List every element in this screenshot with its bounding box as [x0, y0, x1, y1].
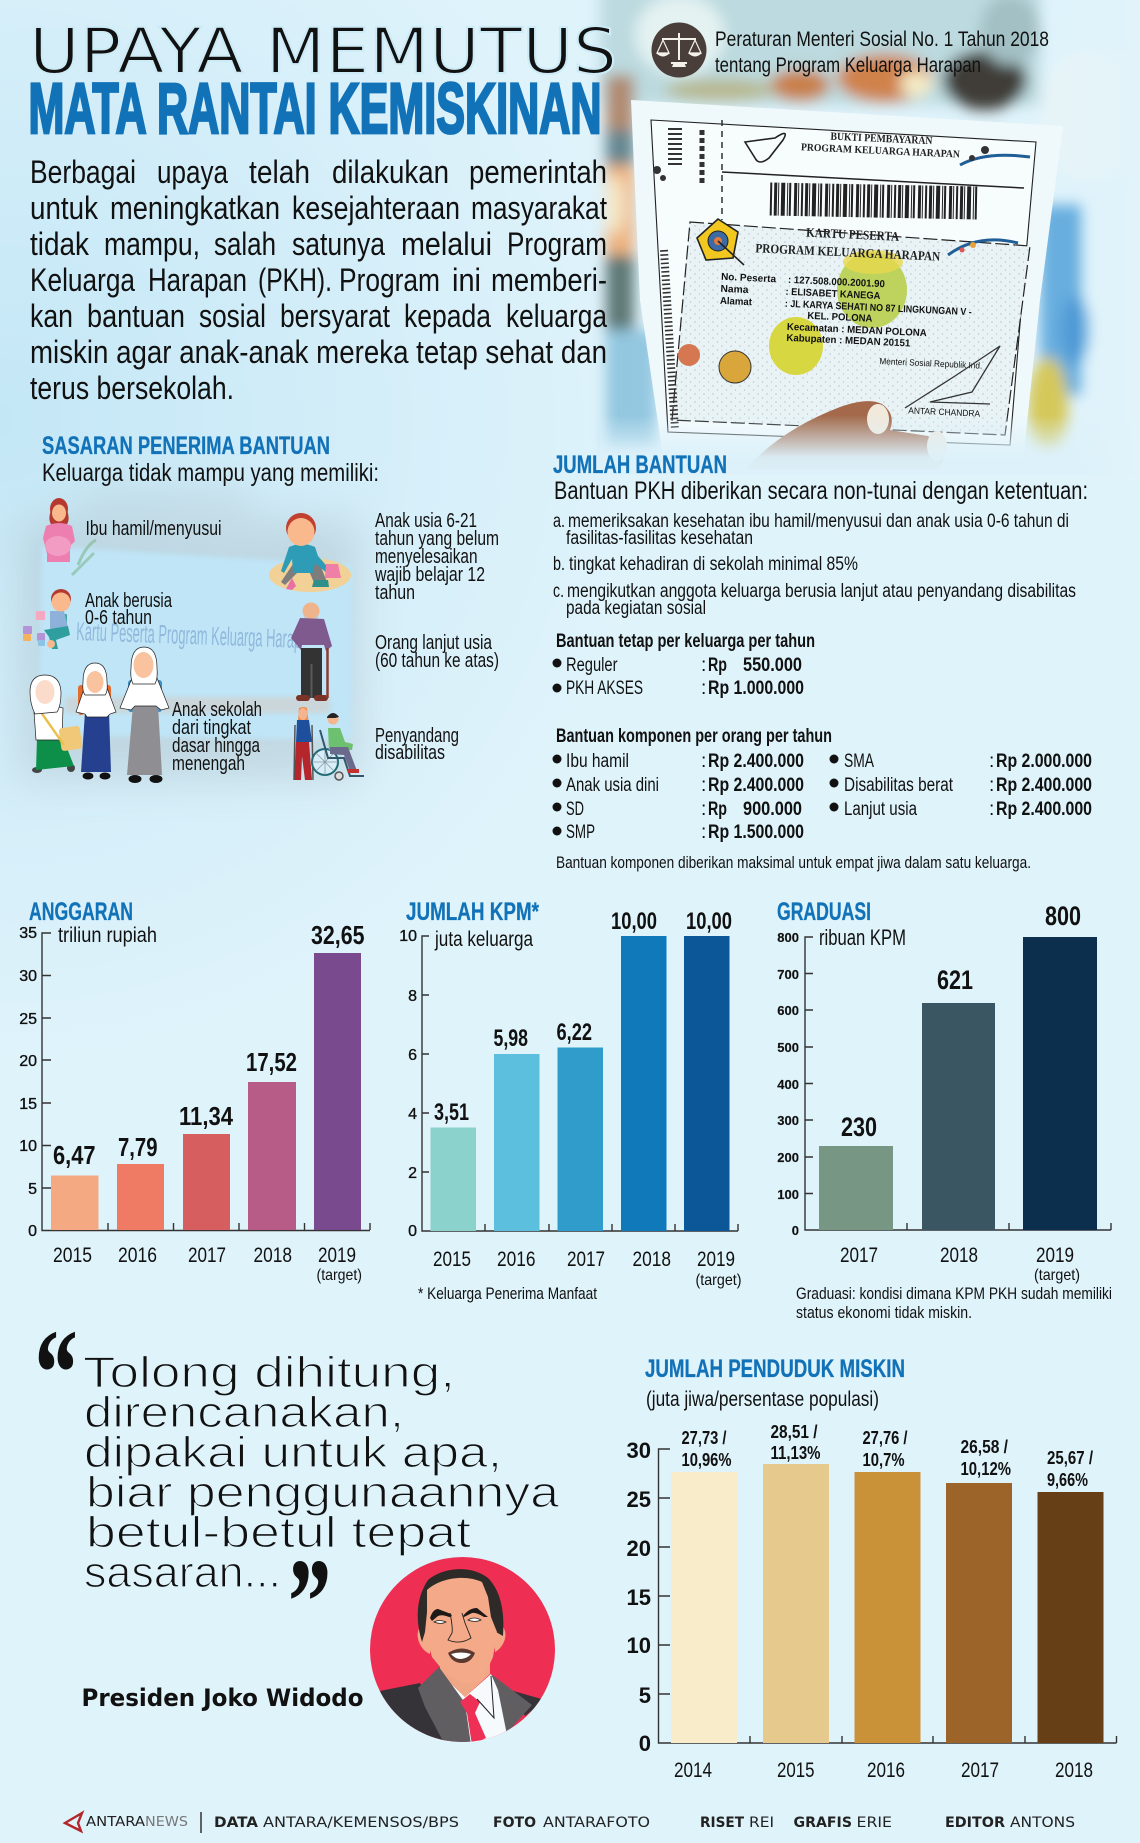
y axis: 30 — [19, 968, 37, 985]
credit: foto — [493, 1815, 650, 1831]
bantuan komponen table: Rp 2.400.000 — [708, 775, 804, 796]
intro paragraph: masyarakat — [471, 190, 607, 226]
credit: data: ANTARA/KEMENSOS/BPS — [263, 1815, 459, 1831]
bantuan tetap table — [552, 631, 815, 699]
note: status ekonomi tidak miskin. — [796, 1303, 972, 1322]
values — [841, 901, 1081, 1142]
y axis: 30 — [627, 1438, 651, 1463]
bantuan komponen table: Rp 1.500.000 — [708, 822, 804, 843]
bantuan tetap table: Reguler — [566, 655, 618, 676]
icon: school girls — [30, 647, 169, 783]
values: 10,12% — [960, 1459, 1011, 1479]
intro paragraph: bantuan — [87, 298, 185, 334]
bantuan komponen table: Rp 2.400.000 — [996, 799, 1092, 820]
regulation reference: Peraturan Menteri Sosial No. 1 Tahun 2018 — [715, 28, 1049, 51]
quote text — [83, 1348, 560, 1597]
y axis: 100 — [777, 1187, 799, 1202]
values: 27,73 / — [682, 1428, 726, 1448]
years: 2018 — [632, 1248, 671, 1271]
bantuan tetap table: PKH AKSES — [566, 678, 643, 699]
intro paragraph: untuk — [30, 190, 99, 226]
intro paragraph — [30, 154, 607, 406]
credit: editor: ANTONS — [1010, 1815, 1075, 1831]
conditions list: a. — [553, 511, 565, 532]
quote text: direncanakan, — [84, 1388, 404, 1437]
label: dasar hingga — [172, 735, 261, 757]
years: 2015 — [433, 1248, 471, 1271]
chart: jumlah penduduk miskin — [627, 1355, 1116, 1782]
card texts: Kabupaten : MEDAN 20151 — [786, 333, 911, 349]
bantuan komponen table: Lanjut usia — [844, 799, 917, 820]
y axis — [19, 925, 370, 1240]
bantuan tetap table: : — [701, 678, 706, 699]
label: Anak usia 6-21 — [375, 510, 477, 532]
intro paragraph: satunya — [292, 226, 385, 262]
values: 11,34 — [179, 1101, 233, 1131]
note — [796, 1284, 1112, 1322]
title — [28, 15, 617, 149]
label: 0-6 tahun — [85, 607, 152, 629]
bantuan komponen table: Ibu hamil — [566, 751, 629, 772]
card texts: Kecamatan : MEDAN POLONA — [787, 322, 927, 339]
heading: jumlah bantuan: JUMLAH BANTUAN — [553, 451, 727, 479]
heading: sasaran: SASARAN PENERIMA BANTUAN — [42, 432, 330, 460]
conditions list: pada kegiatan sosial — [566, 598, 706, 619]
y axis: 15 — [19, 1096, 37, 1113]
y axis: 5 — [28, 1181, 37, 1198]
bantuan komponen table: Anak usia dini — [566, 775, 659, 796]
y axis: 0 — [408, 1223, 417, 1240]
y axis: 6 — [408, 1047, 417, 1064]
bantuan komponen table: Disabilitas berat — [844, 775, 954, 796]
values: 25,67 / — [1047, 1448, 1093, 1468]
credit: editor: EDITOR — [945, 1815, 1005, 1831]
panel: jumlah bantuan — [552, 451, 1092, 872]
bantuan tetap table: : — [701, 655, 706, 676]
card texts: Menteri Sosial Republik Ind. — [879, 356, 983, 371]
y axis: 200 — [777, 1150, 799, 1165]
y axis: 800 — [777, 930, 799, 945]
hand — [745, 401, 943, 470]
credit: riset: REI — [749, 1815, 774, 1831]
bars — [819, 937, 1097, 1230]
y axis: 15 — [627, 1585, 651, 1610]
years: 2017 — [188, 1244, 226, 1267]
bantuan tetap table: 550.000 — [743, 655, 802, 676]
y axis: 5 — [639, 1683, 651, 1708]
values: 3,51 — [434, 1099, 469, 1126]
card texts — [715, 126, 993, 419]
intro paragraph: terus bersekolah. — [30, 370, 234, 406]
label: Orang lanjut usia — [375, 632, 493, 654]
heading: anggaran: ANGGARAN — [29, 898, 133, 926]
label: Penyandang — [375, 725, 459, 747]
credit: editor — [945, 1815, 1075, 1831]
label: Anak sekolah — [172, 699, 262, 721]
label: Anak berusia — [85, 590, 173, 612]
values: 5,98 — [494, 1025, 528, 1052]
card texts: KARTU PESERTA — [806, 225, 900, 244]
y axis: 10 — [399, 928, 417, 945]
y axis — [399, 928, 738, 1240]
y axis: 0 — [792, 1223, 799, 1238]
values: 621 — [937, 965, 973, 995]
values: 10,00 — [686, 908, 732, 935]
intro paragraph: (PKH). — [258, 262, 332, 298]
intro paragraph: Program — [339, 262, 440, 298]
barcode — [770, 199, 977, 203]
photo: kartu peserta PKH — [600, 0, 1140, 480]
bars — [671, 1464, 1104, 1743]
label: menengah — [172, 753, 245, 775]
years: 2014 — [674, 1759, 712, 1782]
card texts: Nama — [720, 284, 749, 296]
label: Ibu hamil/menyusui — [86, 518, 222, 540]
values: 17,52 — [246, 1047, 297, 1077]
values: 800 — [1045, 901, 1081, 931]
y axis: 700 — [777, 967, 799, 982]
values: 26,58 / — [960, 1437, 1008, 1457]
conditions list: fasilitas-fasilitas kesehatan — [566, 528, 753, 549]
years: 2016 — [118, 1244, 157, 1267]
portrait: Presiden Joko Widodo — [370, 1557, 555, 1745]
footer credits — [65, 1812, 1075, 1833]
bantuan komponen table — [552, 726, 1092, 843]
panel: sasaran penerima bantuan — [23, 432, 499, 783]
logo: antaranews: NEWS — [145, 1815, 188, 1830]
conditions list: tingkat kehadiran di sekolah minimal 85% — [569, 554, 858, 575]
card sheet — [631, 100, 1063, 470]
values: 10,7% — [862, 1450, 904, 1470]
label: menyelesaikan — [375, 546, 478, 568]
bantuan tetap table: Rp 1.000.000 — [708, 678, 804, 699]
quote text: betul-betul tepat — [86, 1508, 471, 1557]
conditions list: c. — [553, 581, 564, 602]
intro paragraph: ini — [452, 262, 481, 298]
years: 2015 — [777, 1759, 814, 1782]
bantuan komponen table: Rp 2.400.000 — [996, 775, 1092, 796]
credit: foto: ANTARAFOTO — [543, 1815, 650, 1831]
years: 2018 — [1055, 1759, 1093, 1782]
chart: anggaran — [19, 898, 370, 1284]
card stamps — [837, 252, 907, 328]
y axis: 4 — [408, 1106, 417, 1123]
card texts: PROGRAM KELUARGA HARAPAN — [801, 142, 960, 161]
conditions list — [553, 511, 1076, 619]
intro paragraph: Program — [507, 226, 607, 262]
intro paragraph: meningkatkan — [110, 190, 280, 226]
y axis: 600 — [777, 1003, 799, 1018]
intro paragraph: Berbagai — [30, 154, 136, 190]
icon: scales of justice — [652, 22, 706, 78]
values: 10,00 — [611, 908, 657, 935]
y axis: 400 — [777, 1077, 799, 1092]
bantuan komponen table: : — [701, 799, 706, 820]
closing quote mark: ” — [283, 1534, 329, 1672]
title: UPAYA MEMUTUS — [29, 15, 617, 88]
y axis — [777, 930, 1111, 1238]
values: 27,76 / — [862, 1428, 908, 1448]
unit: ribuan KPM — [819, 925, 906, 950]
bantuan komponen table: : — [701, 751, 706, 772]
bantuan komponen table: 900.000 — [743, 799, 802, 820]
icon: pregnant mother — [43, 498, 75, 562]
credit: grafis: GRAFIS — [794, 1815, 852, 1831]
years: 2017 — [840, 1244, 878, 1267]
note: Bantuan komponen diberikan maksimal untuk empat jiwa dalam satu keluarga. — [556, 853, 1031, 872]
chart: jumlah KPM — [399, 898, 742, 1303]
bantuan komponen table: SD — [566, 799, 584, 820]
intro paragraph: sosial — [199, 298, 266, 334]
years: 2016 — [497, 1248, 536, 1271]
bantuan komponen table: : — [701, 822, 706, 843]
bantuan komponen table: Bantuan komponen per orang per tahun — [556, 726, 832, 747]
quote text: sasaran... — [84, 1548, 281, 1597]
y axis: 0 — [639, 1731, 651, 1756]
years — [840, 1244, 1080, 1284]
credit: riset: RISET — [700, 1815, 744, 1831]
intro paragraph: kan — [30, 298, 73, 334]
intro paragraph: keluarga — [506, 298, 607, 334]
intro paragraph: melalui — [401, 226, 492, 262]
ticket left perforations — [664, 250, 675, 430]
intro paragraph: dilakukan — [332, 154, 449, 190]
attribution: Presiden Joko Widodo — [82, 1684, 364, 1712]
years: 2016 — [867, 1759, 905, 1782]
label: disabilitas — [375, 742, 445, 764]
values: 230 — [841, 1112, 877, 1142]
credit: grafis: ERIE — [856, 1815, 892, 1831]
subheading: sasaran: Keluarga tidak mampu yang memiliki: — [42, 459, 379, 487]
bantuan komponen table: : — [989, 775, 994, 796]
intro paragraph: bersyarat — [280, 298, 390, 334]
intro paragraph: pemerintah — [469, 154, 607, 190]
values: 6,47 — [53, 1140, 96, 1170]
bantuan komponen table: : — [701, 775, 706, 796]
years: 2019 — [697, 1248, 735, 1271]
y axis: 35 — [19, 925, 37, 942]
quote text: biar penggunaannya — [86, 1468, 560, 1517]
quote text: dipakai untuk apa, — [84, 1428, 502, 1477]
bantuan tetap table: Bantuan tetap per keluarga per tahun — [556, 631, 815, 652]
years: (target) — [696, 1272, 742, 1289]
values: 6,22 — [556, 1019, 592, 1046]
values — [53, 920, 364, 1170]
heading: penduduk miskin: JUMLAH PENDUDUK MISKIN — [645, 1355, 905, 1383]
y axis: 0 — [28, 1223, 37, 1240]
label: tahun — [375, 582, 415, 604]
y axis: 10 — [19, 1138, 37, 1155]
y axis: 10 — [627, 1633, 651, 1658]
bantuan komponen table: SMP — [566, 822, 595, 843]
card texts: PROGRAM KELUARGA HARAPAN — [755, 240, 941, 264]
intro paragraph: Keluarga — [30, 262, 135, 298]
logo: antaranews: ANTARA — [86, 1815, 145, 1830]
quote text: Tolong dihitung, — [83, 1348, 455, 1397]
background: kartu peserta card — [20, 490, 360, 780]
bantuan komponen table: Rp — [708, 799, 727, 820]
intro paragraph: Harapan — [148, 262, 247, 298]
values: 9,66% — [1047, 1470, 1088, 1490]
years: 2019 — [318, 1244, 356, 1267]
bars — [430, 936, 730, 1231]
years — [433, 1248, 742, 1289]
values: 7,79 — [118, 1132, 158, 1162]
label: (60 tahun ke atas) — [375, 650, 499, 672]
bantuan komponen table: SMA — [844, 751, 874, 772]
card texts: : 127.508.000.2001.90 — [788, 275, 886, 290]
bantuan komponen table: : — [989, 751, 994, 772]
intro paragraph: upaya — [157, 154, 228, 190]
card texts: : JL KARYA SEHATI NO 87 LINGKUNGAN V - — [785, 299, 972, 318]
years — [53, 1244, 362, 1284]
conditions list: b. — [553, 554, 565, 575]
unit: (juta jiwa/persentase populasi) — [646, 1388, 879, 1411]
card texts: KEL. POLONA — [807, 311, 873, 325]
values: 32,65 — [311, 920, 364, 950]
icon: toddler with blocks — [23, 589, 71, 649]
regulation reference — [715, 28, 1049, 77]
logo: antaranews — [65, 1813, 188, 1831]
bantuan tetap table: Rp — [708, 655, 727, 676]
intro paragraph: miskin agar anak-anak mereka tetap sehat dan — [30, 334, 607, 370]
years — [674, 1759, 1093, 1782]
y axis — [627, 1438, 1116, 1756]
intro paragraph: mampu, — [104, 226, 200, 262]
unit: juta keluarga — [434, 928, 533, 951]
unit: triliun rupiah — [58, 924, 157, 947]
y axis: 2 — [408, 1165, 417, 1182]
years: 2017 — [961, 1759, 999, 1782]
intro paragraph: telah — [249, 154, 310, 190]
y axis: 300 — [777, 1113, 799, 1128]
bantuan komponen table: Rp 2.400.000 — [708, 751, 804, 772]
years: 2018 — [940, 1244, 978, 1267]
y axis: 20 — [19, 1053, 37, 1070]
bars — [51, 953, 361, 1230]
y axis: 25 — [19, 1011, 37, 1028]
regulation reference: tentang Program Keluarga Harapan — [715, 54, 981, 77]
background: kartu peserta card: Kartu Peserta Program Keluarga Harap — [76, 616, 302, 654]
values — [682, 1422, 1093, 1490]
bantuan komponen table: Rp 2.000.000 — [996, 751, 1092, 772]
credit: data — [214, 1815, 459, 1831]
credit: riset — [700, 1815, 774, 1831]
heading: jumlah kpm: JUMLAH KPM* — [406, 898, 539, 926]
quote — [30, 1305, 560, 1712]
years: 2018 — [254, 1244, 292, 1267]
values: 28,51 / — [770, 1422, 818, 1442]
card texts: : ELISABET KANEGA — [785, 287, 881, 302]
opening quote mark: “ — [30, 1305, 76, 1443]
intro paragraph: salah — [214, 226, 276, 262]
years: 2019 — [1036, 1244, 1074, 1267]
card logos — [745, 133, 785, 162]
icon: disabled people with wheelchair — [294, 707, 364, 780]
icon: elderly man with cane — [291, 602, 332, 701]
card texts: No. Peserta — [721, 272, 777, 285]
values: 11,13% — [770, 1443, 820, 1463]
values: 10,96% — [682, 1450, 732, 1470]
title: MATA RANTAI KEMISKINAN — [28, 70, 602, 149]
label: tahun yang belum — [375, 528, 499, 550]
credit: data: DATA — [214, 1815, 258, 1831]
years: (target) — [1034, 1267, 1080, 1284]
intro paragraph: memberi- — [491, 262, 607, 298]
card texts: ANTAR CHANDRA — [908, 405, 980, 419]
years: 2015 — [53, 1244, 92, 1267]
y axis: 500 — [777, 1040, 799, 1055]
footnote: * Keluarga Penerima Manfaat — [418, 1284, 597, 1303]
credit: foto: FOTO — [493, 1815, 536, 1831]
label: wajib belajar 12 — [374, 564, 485, 586]
credit: grafis — [794, 1815, 892, 1831]
label: dari tingkat — [172, 717, 251, 739]
card texts: Alamat — [720, 296, 753, 308]
years: (target) — [316, 1267, 362, 1284]
bantuan komponen table: : — [989, 799, 994, 820]
y axis: 20 — [627, 1536, 651, 1561]
intro paragraph: kesejahteraan — [292, 190, 460, 226]
intro paragraph: tidak — [30, 226, 90, 262]
icon: child in sandbox — [269, 513, 351, 592]
years: 2017 — [567, 1248, 605, 1271]
y axis: 25 — [627, 1487, 651, 1512]
values — [434, 908, 732, 1126]
intro paragraph: kepada — [404, 298, 491, 334]
card texts: BUKTI PEMBAYARAN — [830, 131, 933, 147]
chart: graduasi — [777, 898, 1112, 1322]
y axis: 8 — [408, 988, 417, 1005]
heading: graduasi: GRADUASI — [777, 898, 871, 926]
